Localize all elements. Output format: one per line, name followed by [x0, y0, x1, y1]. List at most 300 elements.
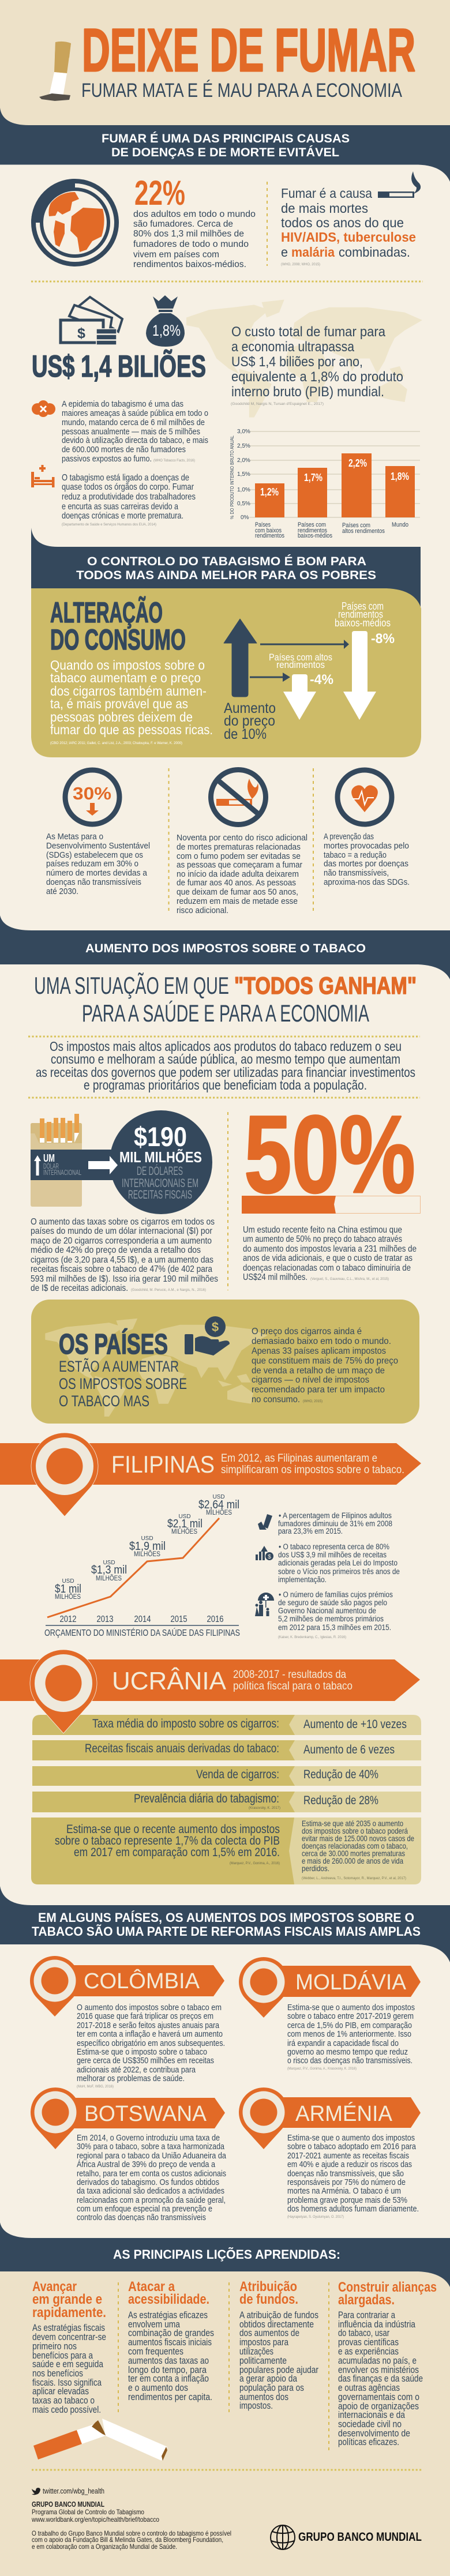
line chart: health budget: $2,64 mil: [198, 1499, 239, 1511]
lesson: go big: As estratégias fiscais: [32, 2323, 105, 2333]
text: tobacco revenue: implementação.: [278, 1575, 327, 1584]
text: ninety percent: de mortes prematuras relacionadas: [177, 842, 301, 852]
line chart: health budget: USD: [141, 1535, 153, 1542]
text: poor quit more: ta, é mais provável que as: [50, 696, 188, 711]
text: prevention: [324, 832, 410, 887]
text: total cost: a economia ultrapassa: [231, 339, 355, 355]
line chart: health budget: MILHÕES: [55, 1592, 81, 1601]
lesson: alliances: sociedade civil no: [338, 2419, 402, 2429]
panel: Moldávia: irá expandir a capacidade fiscal do: [287, 2038, 399, 2048]
bar chart: GDP cost: Países com: [298, 521, 326, 528]
lesson: go big: primeiro nos: [32, 2341, 77, 2352]
banner: Ucrânia: UCRÂNIA: [112, 1667, 227, 1695]
text: china study: anos de vida adicionais, e que o custo de tratar as: [243, 1253, 412, 1263]
text: 22% of adults: são fumadores. Cerca de: [133, 219, 233, 229]
row: cigarette sales: Venda de cigarros:: [196, 1768, 279, 1781]
icon: cigarette butt: [39, 42, 71, 101]
text: smoking prevalence: fumadores diminuiu de 31% em 2008: [278, 1519, 392, 1528]
lesson: go big: devem concentrar-se: [32, 2332, 106, 2342]
panel: Colômbia: (MoH, MoF, WBG, 2016): [77, 2085, 114, 2089]
map background: [45, 1319, 268, 1417]
lesson: alliances: e outras agências: [338, 2383, 400, 2393]
section band: tax increase: AUMENTO DOS IMPOSTOS SOBRE O TABACO: [85, 942, 366, 955]
text: 22% of adults: [133, 174, 256, 269]
text: health insurance: de seguro de saúde são pagos pelo: [278, 1598, 387, 1607]
icon: cigarette pack with $190: DE DÓLARES: [137, 1165, 183, 1178]
label: price increase: do preço: [224, 713, 275, 729]
heading: os países: O TABACO MAS: [59, 1392, 149, 1410]
line chart: health budget: MILHÕES: [134, 1549, 160, 1558]
row: GDP estimate: doenças relacionadas com o tabaco,: [302, 1841, 408, 1850]
text: diseases: doenças crónicas e morte prematura.: [62, 511, 183, 521]
lesson: earmarking: Atribuição: [239, 2279, 297, 2295]
text: SDG targets: Desenvolvimento Sustentável: [46, 841, 150, 851]
text: 22% of adults: fumadores de todo o mundo: [133, 239, 249, 249]
text: epidemic: A epidemia do tabagismo é uma das: [62, 399, 183, 409]
text: health insurance: 5,2 milhões de membros primários: [278, 1614, 384, 1623]
banner: Ucrânia: 2008-2017 - resultados da: [233, 1669, 346, 1681]
heading: os países: ESTÃO A AUMENTAR: [59, 1357, 179, 1375]
row: GDP estimate: (Marquez, P.V., Gonima, A., 2016): [230, 1861, 280, 1865]
lesson: alliances: governamentais com o: [338, 2392, 419, 2402]
text: 22% of adults: 80% dos 1,3 mil milhões de: [133, 229, 244, 239]
bar chart: GDP cost: Países com: [342, 522, 370, 529]
text: one dollar increase: cigarros (de 3,20 para 4,55 I$), e a um aumento das: [31, 1255, 213, 1265]
line chart: health budget: MILHÕES: [171, 1527, 197, 1535]
text: poor quit more: dos cigarros também aumen-: [50, 684, 207, 699]
panel: Moldávia: com menos de 1% anteriormente. Isso: [287, 2029, 411, 2039]
logo: World Bank Group: GRUPO BANCO MUNDIAL: [298, 2530, 422, 2544]
lesson: earmarking: A atribuição de fundos: [239, 2310, 318, 2320]
text: prevention: mortes provocadas pelo: [324, 841, 409, 851]
text: epidemic: pessoas anualmente — mais de 5 milhões: [62, 427, 200, 437]
icon: cigarette pack with $190: UM: [43, 1152, 55, 1164]
text: tobacco revenue: adicionais geradas pela Lei do Imposto: [278, 1559, 397, 1567]
row: GDP estimate: em 2017 em comparação com 1,5% em 2016.: [74, 1846, 280, 1859]
row: GDP estimate: Estima-se que o recente aumento dos impostos: [66, 1823, 280, 1836]
text: ninety percent: reduzem em mais de metade esse: [177, 896, 298, 906]
arrow: price increase: [224, 619, 257, 697]
bar chart: GDP cost: rendimentos: [298, 527, 327, 534]
lesson: go big: fiscais. Isso significa: [32, 2378, 102, 2388]
text: diseases: O tabagismo está ligado a doenças de: [62, 473, 189, 483]
panel: Arménia: 2017-2021 aumente as receitas fiscais: [287, 2151, 409, 2161]
text: epidemic: mundo, matando cerca de 6 mil milhões de: [62, 418, 205, 427]
arrow: -8%: [343, 631, 376, 720]
text: too cheap: cigarros — o nível de impostos: [252, 1375, 369, 1385]
heading: os países: OS PAÍSES: [59, 1329, 168, 1360]
lesson: go big: em grande e: [32, 2292, 102, 2307]
panel: Colômbia: adicionais até 2022, e contribua para: [77, 2065, 196, 2075]
text: poor quit more: (CBO 2012; IARC 2011; Gallet, C. and List, J.A., 2003; Chaloupka, F. e Warner, K. 2000): [50, 741, 182, 745]
icon: cigarette pack with $190: MIL MILHÕES: [119, 1148, 202, 1166]
lesson: alliances: provas científicas: [338, 2337, 399, 2348]
text: leading cause of death: de mais mortes: [281, 201, 368, 216]
lesson: earmarking: populares pode ajudar: [239, 2365, 318, 2375]
text: poor quit more: pessoas pobres deixem de: [50, 709, 193, 724]
panel: Botswana: (Parlamento da República do Botswana, 2011): [104, 2226, 172, 2230]
text: ninety percent: (Jha, P. e Peto, R. 2014): [177, 919, 212, 923]
panel: tobacco control heading: [31, 528, 421, 610]
text: epidemic: de 600.000 mortes de não fumadores: [62, 445, 186, 455]
lesson: earmarking: impostos.: [239, 2401, 273, 2411]
lesson: earmarking: obtidos directamente: [239, 2319, 314, 2330]
text: too cheap: O preço dos cigarros ainda é: [252, 1327, 362, 1336]
icon: cigarette pack with $190: [31, 1110, 212, 1214]
icon: 30% circle: [65, 770, 119, 824]
section band: lessons: [0, 2221, 450, 2576]
icon: family under umbrella: [255, 1593, 274, 1616]
icon: twitter bird: [32, 2488, 40, 2495]
lesson: affordability: com frequentes: [128, 2346, 183, 2357]
text: ninety percent: com o fumo podem ser evitadas se: [177, 851, 301, 861]
section heading: causes: DE DOENÇAS E DE MORTE EVITÁVEL: [111, 146, 339, 159]
lesson: alliances: alargadas.: [338, 2292, 395, 2308]
text: leading cause of death: todos os anos do que: [281, 215, 404, 230]
bar chart: GDP cost: 2,2%: [348, 457, 367, 469]
line chart: health budget: ORÇAMENTO DO MINISTÉRIO DA SAÚDE DAS FILIPINAS: [44, 1627, 240, 1638]
text: prevention: tabaco = a redução: [324, 850, 387, 860]
panel: Moldávia: o risco das doenças não transmissíveis.: [287, 2056, 412, 2066]
bar chart: GDP cost: 1,7%: [304, 472, 322, 483]
bar chart: GDP cost: com baixos: [255, 527, 282, 534]
text: ninety percent: as pessoas que começaram a fumar: [177, 860, 302, 870]
text: SDG targets: [46, 832, 150, 896]
panel: Arménia: doenças não transmissíveis, que são: [287, 2169, 404, 2179]
bar chart: GDP cost: 1,0%: [237, 487, 250, 493]
label: low-middle income: [335, 600, 391, 629]
icon: hospital bed: [31, 465, 54, 487]
row: cigarette sales: [32, 1766, 421, 1786]
panel: Botswana: BOTSWANA: [84, 2102, 207, 2126]
text: epidemic: devido à utilização directa do tabaco, e mais: [62, 435, 208, 445]
arrow: -4%: [283, 674, 316, 720]
panel: Botswana: regional para o tabaco da União Aduaneira da: [77, 2151, 227, 2161]
panel: Colômbia: Estima-se que o imposto sobre o tabaco: [77, 2047, 207, 2057]
text: health insurance: Governo Nacional aumentou de: [278, 1606, 376, 1615]
label: high income: rendimentos: [276, 659, 325, 670]
label: high income: [269, 652, 332, 670]
text: 22% of adults: 22%: [134, 174, 185, 212]
panel: Moldávia: cerca de 1,5% do PIB, em comparação: [287, 2021, 412, 2030]
footer text: O trabalho do Grupo Banco Mundial sobre o controlo do tabagismo é possível: [32, 2529, 231, 2537]
panel: Colômbia: O aumento dos impostos sobre o tabaco em: [77, 2003, 222, 2012]
panel: Arménia: mortes na Arménia. O tabaco é um: [287, 2186, 401, 2196]
panel: Arménia: problema grave porque mais de 53%: [287, 2195, 407, 2205]
text: ninety percent: [177, 833, 308, 923]
text: health insurance: em 2012 para 15,3 milhões em 2015.: [278, 1623, 391, 1632]
lesson: affordability: ter em conta a inflação: [128, 2374, 209, 2384]
text: one dollar increase: países do mundo de um dólar internacional ($I) por: [31, 1226, 213, 1236]
text: prevention: das mortes por doenças: [324, 859, 408, 869]
text: diseases: e encurta as suas carreiras devido a: [62, 502, 178, 512]
banner: Ucrânia: política fiscal para o tabaco: [233, 1680, 352, 1692]
label: price increase: [224, 700, 276, 742]
lesson: affordability: longo do tempo, para: [128, 2365, 207, 2375]
label: high income: Países com altos: [269, 652, 332, 663]
icon: cigarette pack with $190: INTERNACIONAIS EM: [122, 1177, 198, 1190]
line chart: health budget: 2012: [60, 1614, 77, 1624]
text: tobacco revenue: sobre o Vício nos primeiros três anos de: [278, 1567, 400, 1576]
text: epidemic: [62, 399, 208, 464]
panel: Arménia: (Hayrapetyan, S. Oyulumyan, O. 2017): [287, 2215, 344, 2219]
lesson: affordability: rendimentos per capita.: [128, 2392, 212, 2402]
text: total cost: (Goodchild M, Nargis N, Tursan d'Espaignet E., 2017): [231, 402, 324, 406]
text: china study: US$24 mil milhões.: [243, 1272, 308, 1282]
line chart: health budget: $1,9 mil: [129, 1540, 166, 1553]
row: GDP estimate: (Webber, L., Andreeva, T.I., Sotomayor, R., Marquez, P.V., et al, 2017): [302, 1876, 406, 1880]
text: total cost: interno bruto (PIB) mundial.: [231, 384, 384, 400]
text: china study: [243, 1225, 417, 1282]
lesson: alliances: desenvolvimento de: [338, 2428, 410, 2439]
row: daily prevalence: Redução de 28%: [303, 1794, 378, 1807]
bar chart: GDP cost: 0%: [241, 515, 249, 521]
panel: consumption change: [31, 588, 421, 757]
lesson: go big: Avançar: [32, 2279, 77, 2295]
label: price increase: de 10%: [224, 726, 267, 742]
line chart: health budget: USD: [178, 1514, 191, 1520]
panel: Botswana: 30% para o tabaco, sobre a taxa harmonizada: [77, 2142, 225, 2151]
text: total cost: [231, 324, 403, 406]
lesson: alliances: e as experiências: [338, 2346, 399, 2357]
label: low-middle income: Países com: [342, 600, 384, 612]
map background: [186, 299, 422, 418]
panel: Colômbia: COLÔMBIA: [84, 1968, 200, 1993]
lesson: go big: saúde e em seguida: [32, 2359, 104, 2370]
panel: Botswana: derivados do tabagismo. Os fundos obtidos: [77, 2177, 219, 2187]
icon: banknotes: $: [77, 325, 85, 341]
lesson: affordability: [128, 2279, 214, 2402]
text: leading cause of death: HIV/AIDS, tuberculose: [281, 230, 416, 245]
text: smoking prevalence: [278, 1511, 392, 1535]
heading: alteração do consumo: DO CONSUMO: [50, 624, 186, 656]
row: GDP estimate: [31, 1818, 421, 1884]
text: prevention: não transmissíveis,: [324, 868, 389, 878]
lesson: affordability: combinação de grandes: [128, 2328, 214, 2338]
text: one dollar increase: 593 mil milhões de I$). Isso iria gerar 190 mil milhões: [31, 1274, 218, 1284]
icon: bars with coin: $: [268, 1554, 271, 1560]
icon: broken cigarette: [33, 2419, 167, 2461]
text: epidemic: passivos expostos ao fumo.: [62, 454, 152, 464]
text: too cheap: de venda a retalho de um maço de: [252, 1366, 385, 1376]
panel: Colômbia: melhorar os problemas de saúde.: [77, 2074, 185, 2083]
row: tax revenue: [32, 1740, 421, 1760]
text: prevention: aproxima-nos das SDGs.: [324, 877, 410, 887]
row: daily prevalence: [32, 1792, 421, 1812]
row: cigarette sales: Redução de 40%: [303, 1768, 378, 1781]
text: tobacco revenue: dos US$ 3,9 mil milhões de receitas: [278, 1550, 387, 1559]
panel: Moldávia: Estima-se que o aumento dos impostos: [287, 2003, 415, 2012]
icon: no smoking: [211, 769, 265, 825]
text: ninety percent: de fumar aos 40 anos. As pessoas: [177, 878, 296, 888]
panel: Arménia: Estima-se que o aumento dos impostos: [287, 2133, 415, 2143]
text: health insurance: • O número de famílias cujos prémios: [279, 1590, 393, 1599]
panel: tobacco control heading: O CONTROLO DO TABAGISMO É BOM PARA: [87, 555, 366, 568]
icon: money bag: [146, 295, 185, 347]
text: too cheap: [252, 1327, 398, 1405]
section heading: causes: FUMAR É UMA DAS PRINCIPAIS CAUSAS: [102, 132, 350, 145]
lesson: alliances: Para contrariar a: [338, 2310, 396, 2320]
text: one dollar increase: O aumento das taxas sobre os cigarros em todos os: [31, 1217, 215, 1227]
icon: hand holding cigarette: [258, 1514, 272, 1530]
bar chart: GDP cost: 0,5%: [237, 501, 250, 507]
icon: money bag: 1,8%: [152, 322, 181, 339]
line chart: health budget: 2013: [97, 1614, 114, 1624]
row: average tax rate: Aumento de +10 vezes: [303, 1718, 407, 1731]
text: leading cause of death: e: [281, 245, 288, 260]
text: SDG targets: As Metas para o: [46, 832, 103, 842]
section band: broader reforms: TABACO SÃO UMA PARTE DE REFORMAS FISCAIS MAIS AMPLAS: [32, 1924, 421, 1939]
lesson: alliances: do tabaco, usar: [338, 2328, 389, 2338]
row: tax revenue: Aumento de 6 vezes: [303, 1743, 395, 1756]
section band: broader reforms: EM ALGUNS PAÍSES, OS AUMENTOS DOS IMPOSTOS SOBRE O: [38, 1910, 414, 1925]
text: one dollar increase: receitas fiscais sobre o tabaco de 47% (de 402 para: [31, 1264, 212, 1274]
text: ninety percent: Noventa por cento do risco adicional: [177, 833, 308, 843]
lesson: earmarking: a gerar apoio da: [239, 2374, 298, 2384]
icon: cigarette pack with $190: DÓLAR: [43, 1162, 59, 1170]
row: GDP estimate: e mais de 260.000 de anos de vida: [302, 1856, 403, 1865]
panel: Botswana: África Austral de 39% do preço de venda a: [77, 2160, 216, 2169]
text: tobacco revenue: • O tabaco representa cerca de 80%: [279, 1542, 389, 1551]
lesson: earmarking: aumentos dos: [239, 2392, 288, 2402]
lesson: go big: nos benefícios: [32, 2368, 83, 2379]
text: china study: um aumento de 50% no preço do tabaco através: [243, 1234, 402, 1244]
panel: Arménia: sobre o tabaco adoptado em 2016 para: [287, 2142, 417, 2151]
icon: cigarette pack with $190: INTERNACIONAL: [43, 1168, 81, 1177]
text: one dollar increase: (Goodchild, M. Perucic, A.M., e Nargis, N., 2016): [131, 1288, 206, 1292]
section band: broader reforms: [0, 1885, 450, 1963]
lesson: earmarking: dos aumentos de: [239, 2328, 299, 2338]
panel: Botswana: controlo das doenças não transmissíveis: [77, 2213, 206, 2222]
lesson: affordability: As estratégias eficazes: [128, 2310, 208, 2320]
bar chart: GDP cost: 3,0%: [237, 429, 250, 435]
footer text: Programa Global de Controlo do Tabagismo: [32, 2508, 144, 2516]
text: too cheap: demasiado baixo em todo o mundo.: [252, 1336, 391, 1346]
heading: US$ 1,4 biliões: US$ 1,4 BILIÕES: [32, 349, 206, 384]
text: diseases: quase todos os órgãos do corpo. Fumar: [62, 482, 194, 492]
line chart: health budget: USD: [62, 1578, 74, 1584]
row: GDP estimate: perdidos.: [302, 1864, 329, 1873]
lesson: affordability: Atacar a: [128, 2279, 175, 2295]
panel: Arménia: ARMÉNIA: [295, 2101, 393, 2126]
panel: Moldávia: (Marquez, P.V., Gonima, A., Krasovsky, K. 2016): [287, 2067, 357, 2071]
heading: alteração do consumo: ALTERAÇÃO: [50, 596, 163, 629]
panel: Botswana: relacionadas com a promoção da saúde geral,: [77, 2195, 226, 2205]
row: GDP estimate: dos impostos sobre o tabaco poderá: [302, 1826, 408, 1835]
bar chart: GDP cost: Países: [255, 521, 271, 528]
line chart: health budget: $1 mil: [55, 1583, 81, 1595]
text: china study: Um estudo recente feito na China estimou que: [243, 1225, 402, 1235]
lesson: affordability: e o aumento dos: [128, 2383, 188, 2393]
bar chart: GDP cost: 1,8%: [391, 471, 409, 482]
line chart: health budget: $1,3 mil: [91, 1564, 127, 1576]
line chart: health budget: 2014: [134, 1614, 151, 1624]
logo: World Bank Group: [271, 2525, 422, 2549]
text: 22% of adults: rendimentos baixos-médios.: [133, 260, 246, 269]
text: SDG targets: países reduzam em 30% o: [46, 859, 138, 869]
text: china study: (Verguet, S., Gauvreau, C.L., Mishra, M., et al, 2015): [310, 1277, 389, 1281]
banner: Filipinas: Em 2012, as Filipinas aumentaram e: [221, 1452, 377, 1465]
panel: Botswana: com um enfoque especial na prevenção e: [77, 2204, 212, 2214]
text: health insurance: (Kaiser, K. Bredenkamp, C., Iglesias, R. 2016): [278, 1635, 346, 1639]
line chart: health budget: 2015: [171, 1614, 187, 1624]
text: total cost: equivalente a 1,8% do produto: [231, 369, 403, 385]
text: one dollar increase: de I$ de receitas adicionais.: [31, 1283, 128, 1293]
bar chart: GDP cost: Mundo: [392, 521, 408, 528]
arrow: to high income: [250, 673, 290, 682]
footer text: GRUPO BANCO MUNDIAL: [32, 2500, 104, 2509]
lesson: go big: mais cedo possível.: [32, 2405, 101, 2415]
panel: Colômbia: específico obrigatório em anos subsequentes.: [77, 2038, 225, 2048]
heading: win-win: UMA SITUAÇÃO EM QUE: [34, 972, 229, 999]
lesson: earmarking: [239, 2279, 318, 2411]
footer text: twitter.com/wbg_health: [43, 2487, 104, 2495]
lesson: earmarking: de fundos.: [239, 2292, 298, 2307]
text: 22% of adults: vivem em países com: [133, 250, 219, 260]
lesson: affordability: aumentos fiscais iniciais: [128, 2337, 212, 2348]
text: too cheap: no consumo.: [252, 1395, 300, 1405]
text: SDG targets: doenças não transmissíveis: [46, 877, 141, 887]
bar chart: GDP cost: 2,5%: [237, 443, 250, 449]
bar chart: GDP cost: 1,5%: [237, 471, 250, 478]
label: low-middle income: baixos-médios: [335, 617, 391, 629]
row: GDP estimate: evitar mais de 125.000 novos casos de: [302, 1834, 414, 1843]
lesson: earmarking: população para os: [239, 2383, 304, 2393]
line chart: health budget: 2016: [207, 1614, 224, 1624]
icon: globe donut 22%: [31, 179, 117, 264]
section heading: causes: [102, 132, 350, 159]
lesson: affordability: acessibilidade.: [128, 2292, 209, 2307]
lesson: alliances: envolver os ministérios: [338, 2365, 419, 2375]
panel: Colômbia: gere cerca de US$350 milhões em receitas: [77, 2056, 214, 2066]
text: SDG targets: número de mortes devidas a: [46, 868, 148, 878]
row: average tax rate: [32, 1715, 421, 1735]
row: average tax rate: Taxa média do imposto sobre os cigarros:: [92, 1717, 279, 1730]
bar chart: GDP cost: % DO PRODUTO INTERNO BRUTO ANUAL: [230, 435, 235, 519]
panel: Botswana: da taxa adicional são dedicados a actividades: [77, 2186, 224, 2196]
panel: Colômbia: ter em conta a inflação e haverá um aumento: [77, 2029, 223, 2039]
text: one dollar increase: médio de 42% do preço de venda a retalho dos: [31, 1245, 201, 1255]
lesson: alliances: das finanças e da saúde: [338, 2374, 423, 2384]
text: one dollar increase: maço de 20 cigarros corresponderia a um aumento: [31, 1236, 212, 1246]
text: tobacco revenue: [278, 1542, 400, 1584]
icon: 30% circle: 30%: [73, 783, 111, 803]
text: intro taxes: [36, 1039, 415, 1092]
header panel: [0, 0, 450, 186]
panel: tobacco control heading: TODOS MAS AINDA MELHOR PARA OS POBRES: [76, 569, 376, 582]
heading: win-win: [34, 972, 417, 1027]
text: SDG targets: (SDGs) estabelecem que os: [46, 850, 143, 860]
arrow: to low-middle income: [260, 640, 349, 649]
text: ninety percent: no início da idade adulta deixarem: [177, 869, 299, 879]
lesson: go big: taxas ao tabaco o: [32, 2395, 95, 2406]
lesson: earmarking: impostos para: [239, 2337, 289, 2348]
text: poor quit more: tabaco aumentam e o preço: [50, 670, 201, 685]
panel: Moldávia: governo ao mesmo tempo que reduz: [287, 2047, 408, 2057]
text: diseases: reduz a produtividade dos trabalhadores: [62, 492, 196, 502]
label: price increase: Aumento: [224, 700, 276, 716]
text: china study: do aumento dos impostos levaria a 231 milhões de: [243, 1244, 417, 1254]
text: too cheap: recomendado para ter um impacto: [252, 1385, 385, 1395]
banner: Filipinas: [0, 1433, 421, 1516]
lesson: go big: rapidamente.: [32, 2305, 106, 2320]
panel: Moldávia: [239, 1957, 421, 2071]
banner: Filipinas: FILIPINAS: [111, 1451, 215, 1478]
text: ninety percent: que deixam de fumar aos 50 anos,: [177, 887, 298, 897]
text: prevention: A prevenção das: [324, 832, 374, 842]
text: leading cause of death: malária: [291, 245, 335, 260]
lesson: alliances: políticas eficazes.: [338, 2437, 399, 2447]
